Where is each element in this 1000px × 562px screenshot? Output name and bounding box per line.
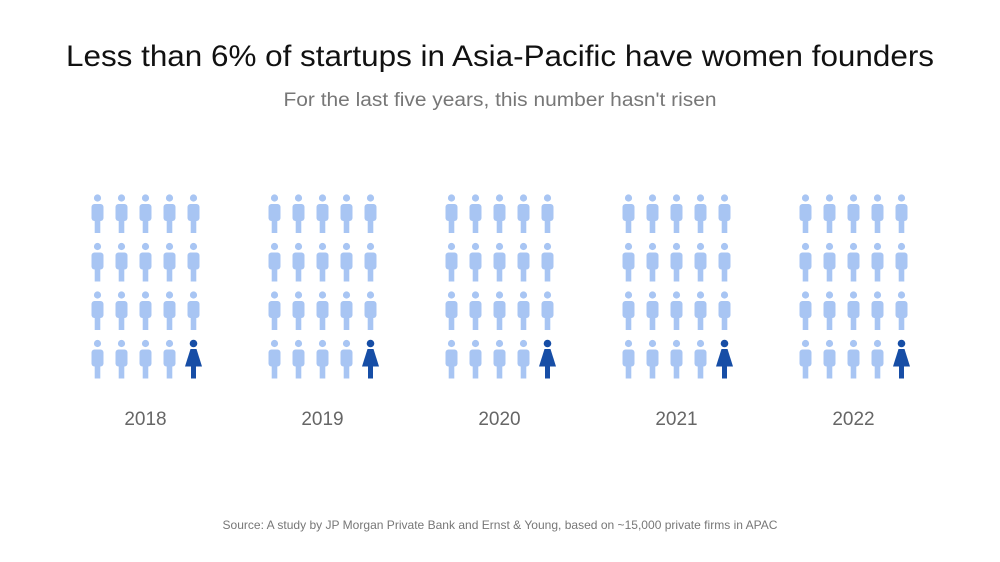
panel: 2019: 2019 bbox=[301, 409, 344, 430]
title: Less than 6% of startups in Asia-Pacific have women founders bbox=[66, 40, 934, 73]
panel: 2022 bbox=[800, 194, 910, 430]
panel: 2019 bbox=[268, 194, 379, 430]
panel: 2018: 2018 bbox=[124, 409, 167, 430]
panel: 2018 bbox=[92, 194, 202, 430]
panel: 2021 bbox=[622, 194, 733, 430]
panel: 2020 bbox=[446, 194, 556, 430]
panel: 2021: 2021 bbox=[655, 409, 698, 430]
source note: Source: A study by JP Morgan Private Bank and Ernst & Young, based on ~15,000 private firms in APAC bbox=[222, 518, 778, 532]
panel: 2020: 2020 bbox=[478, 409, 521, 430]
panel: 2022: 2022 bbox=[832, 409, 875, 430]
subtitle: For the last five years, this number hasn't risen bbox=[284, 90, 716, 111]
